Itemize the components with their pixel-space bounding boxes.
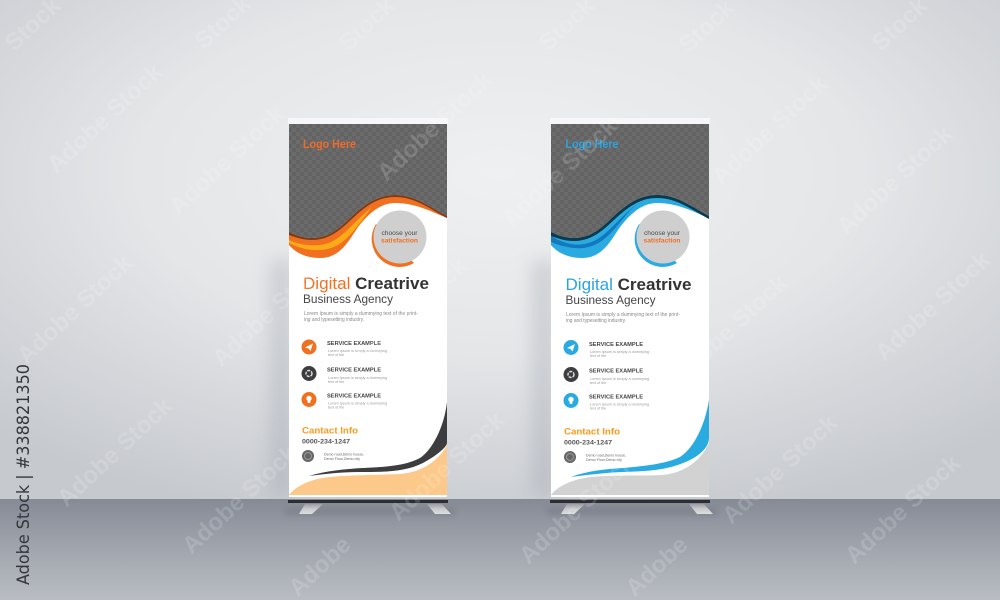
stock watermarks: Adobe Stock [42, 58, 168, 178]
circle badge: choose your [644, 230, 681, 237]
service item 2: SERVICE EXAMPLE [589, 368, 643, 374]
service item 1 [564, 340, 649, 358]
contact info: Cantact Info [564, 426, 620, 438]
headline: Digital Creatrive [303, 275, 429, 293]
logo text: Logo Here [566, 139, 618, 151]
stock watermarks: Adobe Stock [12, 249, 138, 369]
service item 3: text of the [590, 406, 606, 410]
top rail [288, 118, 448, 124]
right banner: blue [550, 118, 713, 514]
stock watermarks: Adobe Stock [372, 66, 498, 186]
stock watermarks: Adobe Stock [52, 392, 178, 512]
stock watermarks: Adobe Stock [840, 449, 966, 569]
floor [0, 499, 1000, 600]
stock watermarks: Adobe Stock [347, 252, 473, 372]
service item 1 [302, 340, 387, 357]
stock watermarks: Adobe Stock [384, 406, 510, 526]
service item 2: text of the [590, 381, 606, 385]
intro text [566, 312, 680, 324]
base cassette [550, 500, 710, 503]
contact info: 0000-234-1247 [564, 440, 612, 446]
stock watermarks: Adobe Stock [717, 409, 843, 529]
intro text: Lorem Ipsum is simply a dummying text of the print- [304, 311, 418, 317]
service item 2 [564, 367, 649, 385]
stock watermarks: Adobe Stock [707, 70, 833, 190]
left banner: orange [288, 118, 451, 514]
intro text: ing and typesetting industry. [304, 317, 364, 323]
stock watermarks: Adobe Stock [832, 120, 958, 240]
service item 2: Lorem Ipsum is simply a dummying [328, 376, 387, 380]
service item 1: Lorem Ipsum is simply a dummying [328, 349, 387, 353]
circle badge [635, 210, 690, 267]
service item 1: text of the [590, 354, 606, 358]
stock watermarks: Adobe [283, 531, 356, 600]
logo text: Logo Here [303, 139, 356, 151]
service item 2: Lorem Ipsum is simply a dummying [590, 377, 649, 381]
stock watermarks: Adobe Stock [667, 269, 793, 389]
peach bottom wave [289, 445, 447, 495]
circle badge: choose your [382, 230, 418, 237]
headline: Digital Creatrive [566, 276, 692, 294]
circle badge: satisfaction [644, 238, 681, 244]
stock watermarks: Adobe Stock [870, 246, 996, 366]
service item 3 [564, 393, 649, 410]
blue swoosh [571, 400, 709, 477]
stand feet [299, 504, 451, 514]
gray bottom wave [551, 443, 709, 495]
service item 1: SERVICE EXAMPLE [589, 342, 643, 348]
photo placeholder checkerboard [551, 124, 709, 238]
stock watermarks: Adobe Stock [497, 112, 623, 232]
circle badge [372, 210, 426, 267]
contact info: 0000-234-1247 [302, 438, 350, 446]
contact info: Demo road,Demo house, [324, 452, 364, 456]
stock watermarks: Adobe Stock [164, 100, 290, 220]
orange wave [289, 195, 447, 258]
top rail [550, 118, 710, 124]
dark swoosh [309, 402, 447, 476]
service item 3: Lorem Ipsum is simply a dummying [328, 402, 387, 406]
intro text [304, 311, 418, 323]
contact info: Demo Floor,Demo city [324, 457, 360, 461]
service item 3: text of the [328, 406, 344, 410]
headline: Business Agency [566, 295, 656, 307]
stand feet [561, 504, 713, 514]
contact info [302, 426, 364, 462]
photo placeholder checkerboard [289, 124, 447, 238]
headline: Business Agency [303, 294, 393, 306]
banner sheet [289, 124, 447, 497]
intro text: ing and typesetting industry. [566, 318, 626, 324]
service item 3: Lorem Ipsum is simply a dummying [590, 402, 649, 406]
service item 3 [302, 392, 387, 410]
stock watermarks: Adobe Stock [177, 439, 303, 559]
stock watermarks: Adobe [620, 531, 693, 600]
stock watermarks: Adobe Stock [514, 449, 640, 569]
banner sheet [551, 124, 709, 497]
headline [303, 275, 429, 306]
floor shadows [285, 508, 717, 515]
base cassette [288, 500, 448, 503]
blue wave [551, 195, 709, 258]
stock watermarks: Adobe Stock [207, 252, 333, 372]
service item 3: SERVICE EXAMPLE [589, 394, 643, 400]
vertical stock id label: Adobe Stock | #338821350 [14, 364, 34, 585]
service item 1: Lorem Ipsum is simply a dummying [590, 350, 649, 354]
contact info: Demo road,Demo house, [586, 454, 626, 458]
service item 1: SERVICE EXAMPLE [327, 341, 381, 347]
circle badge: satisfaction [381, 238, 418, 244]
intro text: Lorem Ipsum is simply a dummying text of the print- [566, 312, 680, 318]
service item 2: text of the [328, 380, 344, 384]
headline [566, 276, 692, 307]
service item 2: SERVICE EXAMPLE [327, 368, 381, 374]
service item 2 [302, 366, 387, 384]
service item 1: text of the [328, 353, 344, 357]
banner shadows on wall [270, 260, 556, 495]
service item 3: SERVICE EXAMPLE [327, 394, 381, 400]
contact info: Cantact Info [302, 426, 358, 436]
contact info: Demo Floor,Demo city [586, 458, 622, 462]
contact info [564, 426, 626, 463]
